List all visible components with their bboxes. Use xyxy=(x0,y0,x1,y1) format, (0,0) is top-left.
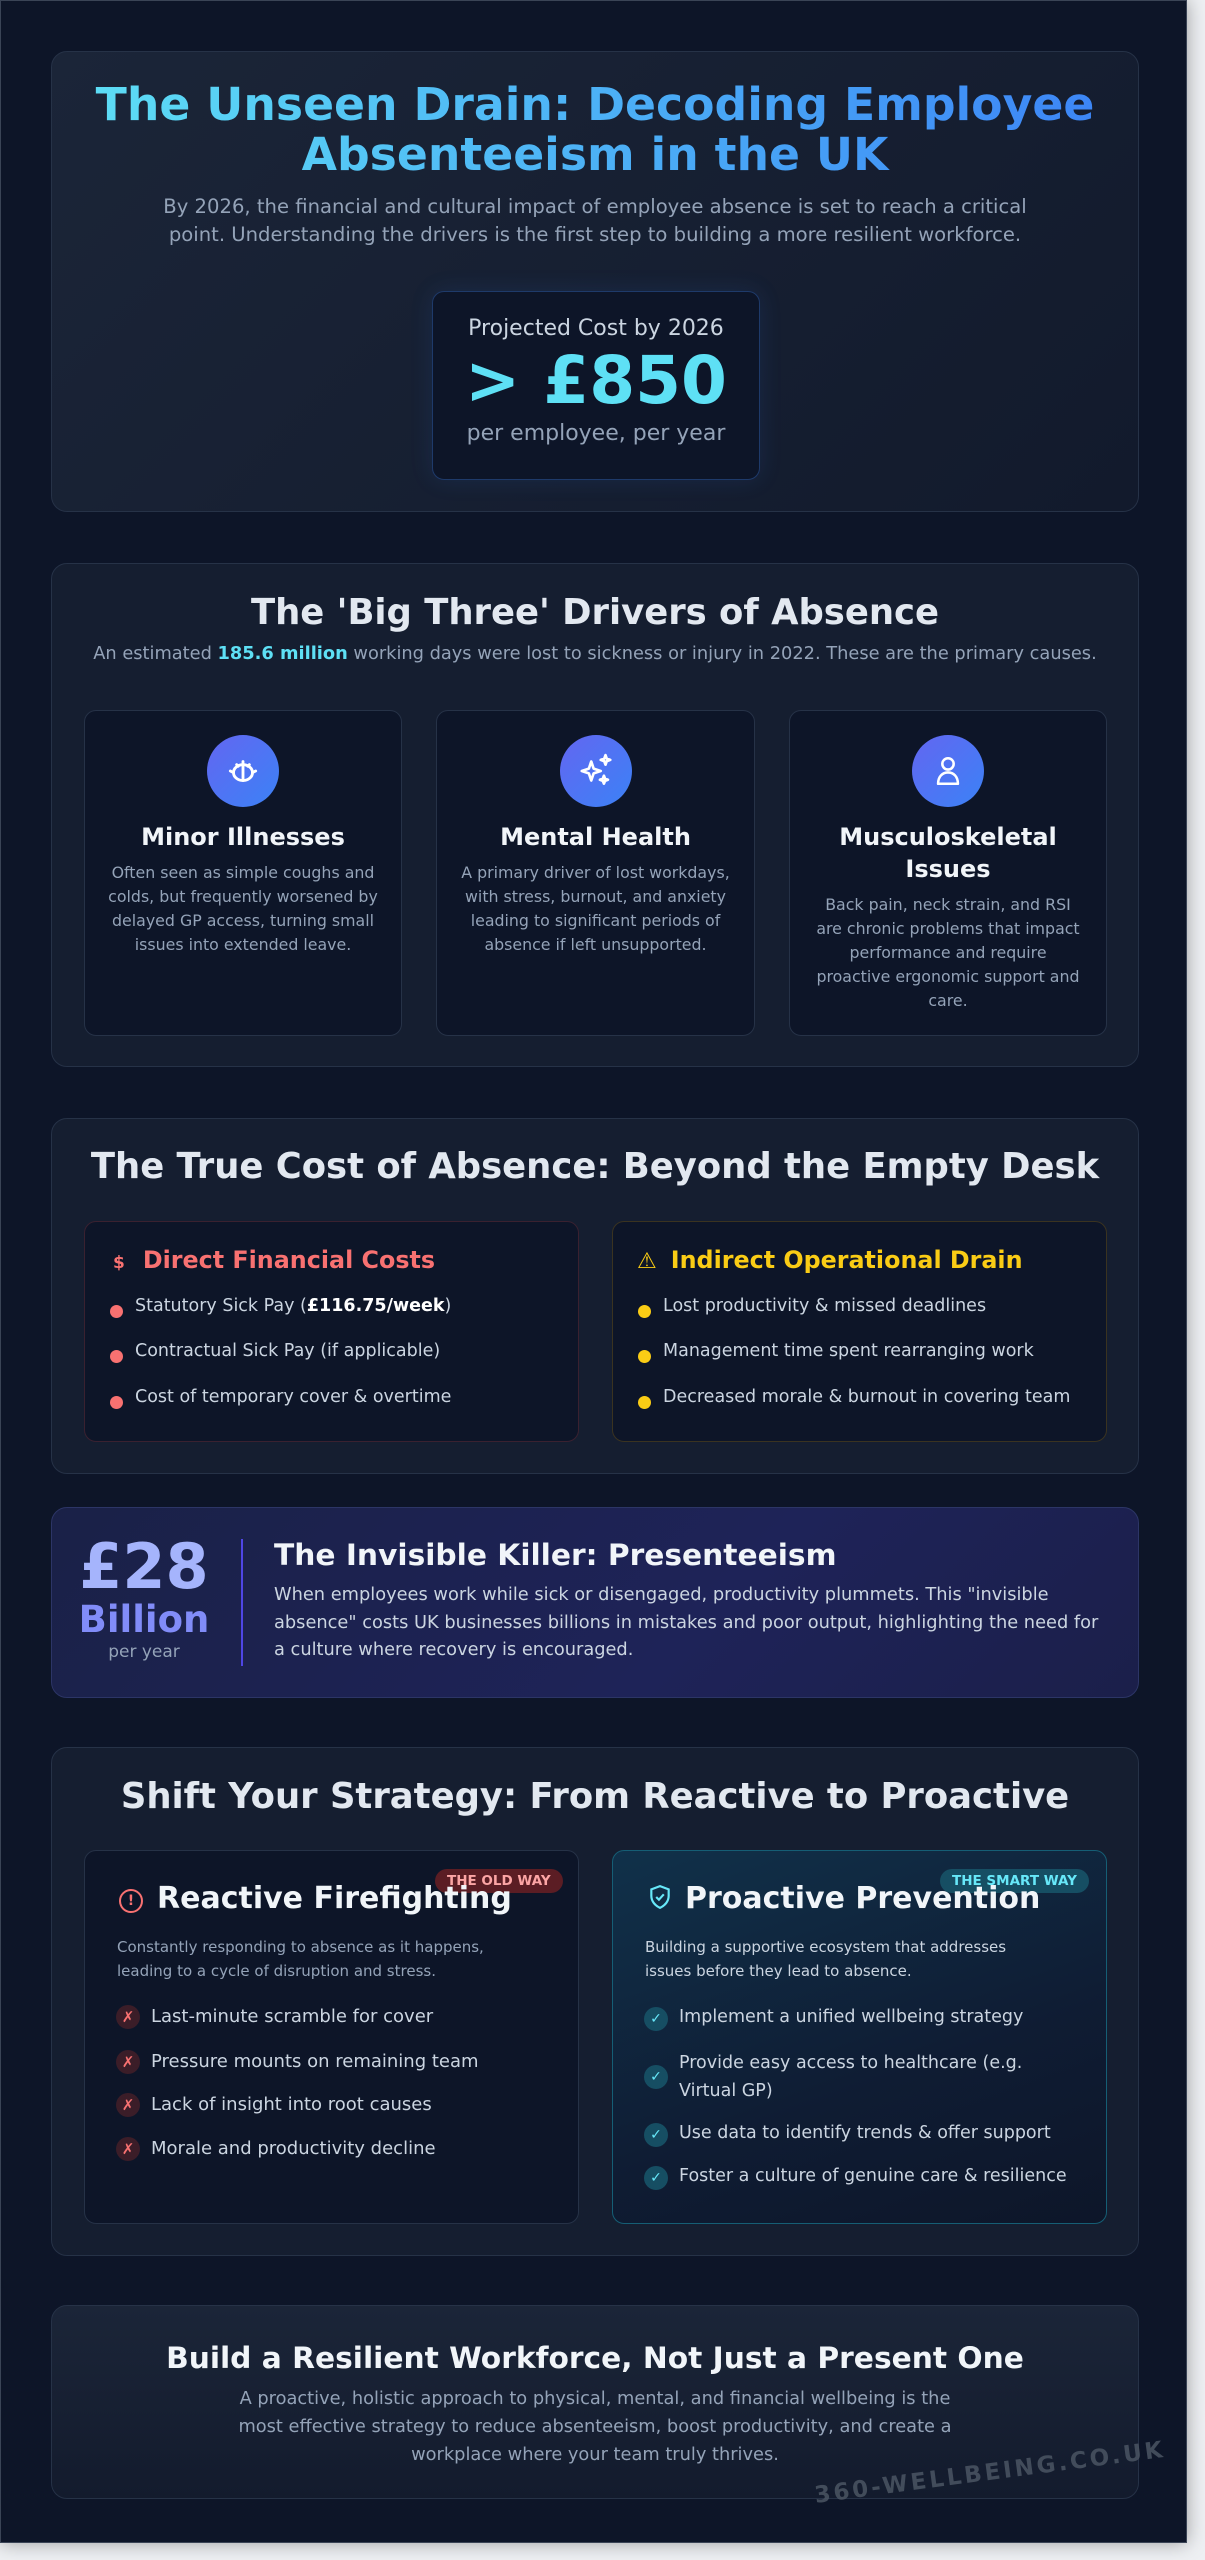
card: proactive: Use data to identify trends & offer support xyxy=(679,2123,1051,2143)
card: reactive: ✗ xyxy=(122,2008,134,2026)
badge: old way: THE OLD WAY xyxy=(447,1873,551,1889)
stat: 28 billion: £28 xyxy=(79,1530,209,1603)
card: proactive: issues before they lead to absence. xyxy=(645,1962,912,1980)
badge: smart way xyxy=(940,1869,1089,1893)
card: reactive xyxy=(84,1850,579,2224)
watermark: 360-WELLBEING.CO.UK xyxy=(813,2437,1167,2509)
heading: indirect: ⚠ Indirect Operational Drain xyxy=(637,1246,1023,1274)
card: minor illnesses xyxy=(84,710,402,1036)
heading: Build a Resilient Workforce, Not Just a Present One xyxy=(166,2341,1024,2376)
card: reactive: Constantly responding to absence as it happens, xyxy=(117,1938,484,1956)
card: reactive: Morale and productivity decline xyxy=(151,2138,436,2159)
title: The Unseen Drain: Decoding Employee xyxy=(96,78,1094,131)
card: direct financial costs: Cost of temporary cover & overtime xyxy=(135,1387,451,1407)
panel: conclusion xyxy=(51,2305,1139,2499)
stat: 28 billion: Billion xyxy=(79,1598,209,1641)
text: workplace where your team truly thrives. xyxy=(411,2444,779,2465)
card: mental health xyxy=(436,710,755,1036)
card: direct financial costs xyxy=(84,1221,579,1442)
heading: reactive: ! xyxy=(128,1893,134,1909)
heading: reactive: Reactive Firefighting xyxy=(157,1881,512,1916)
subtitle: point. Understanding the drivers is the first step to building a more resilient workforce. xyxy=(169,223,1021,246)
panel: true cost xyxy=(51,1118,1139,1474)
card: proactive: ✓ xyxy=(650,2127,662,2143)
card: musculoskeletal: Issues xyxy=(905,855,991,883)
card: reactive: ✗ xyxy=(122,2140,134,2158)
heading: proactive: Proactive Prevention xyxy=(685,1881,1040,1916)
intro text: An estimated 185.6 million working days were lost to sickness or injury in 2022. These are the primary causes. xyxy=(93,643,1097,664)
title xyxy=(52,80,1138,180)
card: minor illnesses: Often seen as simple coughs and colds, but frequently worsened by delayed GP access, turning small issues into extended leave. xyxy=(108,863,378,954)
card: musculoskeletal: Back pain, neck strain, and RSI are chronic problems that impact performance and require proactive ergonomic support and care. xyxy=(816,895,1080,1010)
card: minor illnesses: Minor Illnesses xyxy=(141,823,345,851)
card: reactive: Last-minute scramble for cover xyxy=(151,2006,433,2027)
text xyxy=(238,2388,952,2465)
card: reactive: ✗ xyxy=(122,2096,134,2114)
subtitle xyxy=(163,195,1027,246)
card: proactive xyxy=(612,1850,1107,2224)
heading: The 'Big Three' Drivers of Absence xyxy=(251,592,939,633)
card: proactive: Foster a culture of genuine care & resilience xyxy=(679,2166,1067,2186)
card: indirect operational drain: Management time spent rearranging work xyxy=(663,1341,1034,1361)
panel: strategy xyxy=(51,1747,1139,2256)
text: A proactive, holistic approach to physical, mental, and financial wellbeing is the xyxy=(240,2388,950,2409)
heading: Shift Your Strategy: From Reactive to Proactive xyxy=(121,1776,1069,1817)
text: presenteeism: When employees work while sick or disengaged, productivity plummets. This "invisible absence" costs UK businesses billions in mistakes and poor output, highlighting the need for a culture where recovery is encouraged. xyxy=(274,1584,1098,1660)
card: reactive: Lack of insight into root causes xyxy=(151,2094,432,2115)
stat: 28 billion xyxy=(79,1530,209,1662)
stat box: projected cost xyxy=(432,291,760,480)
panel: hero xyxy=(51,51,1139,512)
card: reactive: Pressure mounts on remaining team xyxy=(151,2051,479,2072)
card: proactive: Virtual GP) xyxy=(679,2081,773,2101)
text: most effective strategy to reduce absenteeism, boost productivity, and create a xyxy=(238,2416,952,2437)
card: direct financial costs: Statutory Sick Pay (£116.75/week) xyxy=(135,1296,451,1316)
card: musculoskeletal xyxy=(789,710,1107,1036)
card: reactive: ✗ xyxy=(122,2053,134,2071)
card: proactive: Implement a unified wellbeing strategy xyxy=(679,2007,1023,2027)
card: mental health: A primary driver of lost workdays, with stress, burnout, and anxiety leading to significant periods of absence if left unsupported. xyxy=(461,863,730,954)
stat box: projected cost: per employee, per year xyxy=(467,421,725,446)
heading: The True Cost of Absence: Beyond the Empty Desk xyxy=(91,1146,1099,1187)
card: proactive: Provide easy access to healthcare (e.g. xyxy=(679,2053,1022,2073)
badge: old way xyxy=(435,1869,563,1893)
text: presenteeism xyxy=(274,1538,1098,1660)
icon: virus xyxy=(207,735,279,807)
card: proactive: ✓ xyxy=(650,2170,662,2186)
text: presenteeism: The Invisible Killer: Presenteeism xyxy=(274,1538,837,1573)
panel: presenteeism xyxy=(51,1507,1139,1698)
card: mental health: Mental Health xyxy=(500,823,691,851)
icon: sparkles xyxy=(560,735,632,807)
title: Absenteeism in the UK xyxy=(302,128,888,181)
stat box: projected cost: > £850 xyxy=(465,342,727,419)
stat: 28 billion: per year xyxy=(108,1642,180,1662)
panel: big three drivers xyxy=(51,563,1139,1067)
card: reactive: leading to a cycle of disruption and stress. xyxy=(117,1962,436,1980)
card: musculoskeletal: Musculoskeletal xyxy=(839,823,1057,851)
card: proactive: Building a supportive ecosystem that addresses xyxy=(645,1938,1006,1956)
card: indirect operational drain: Decreased morale & burnout in covering team xyxy=(663,1387,1070,1407)
heading: direct: $ Direct Financial Costs xyxy=(113,1246,435,1274)
subtitle: By 2026, the financial and cultural impact of employee absence is set to reach a critical xyxy=(163,195,1027,218)
card: indirect operational drain: Lost productivity & missed deadlines xyxy=(663,1296,986,1316)
card: indirect operational drain xyxy=(612,1221,1107,1442)
card: proactive: ✓ xyxy=(650,2011,662,2027)
badge: smart way: THE SMART WAY xyxy=(952,1873,1077,1889)
card: direct financial costs: Contractual Sick Pay (if applicable) xyxy=(135,1341,440,1361)
icon: person xyxy=(912,735,984,807)
card: proactive: ✓ xyxy=(650,2069,662,2085)
stat box: projected cost: Projected Cost by 2026 xyxy=(468,316,724,341)
